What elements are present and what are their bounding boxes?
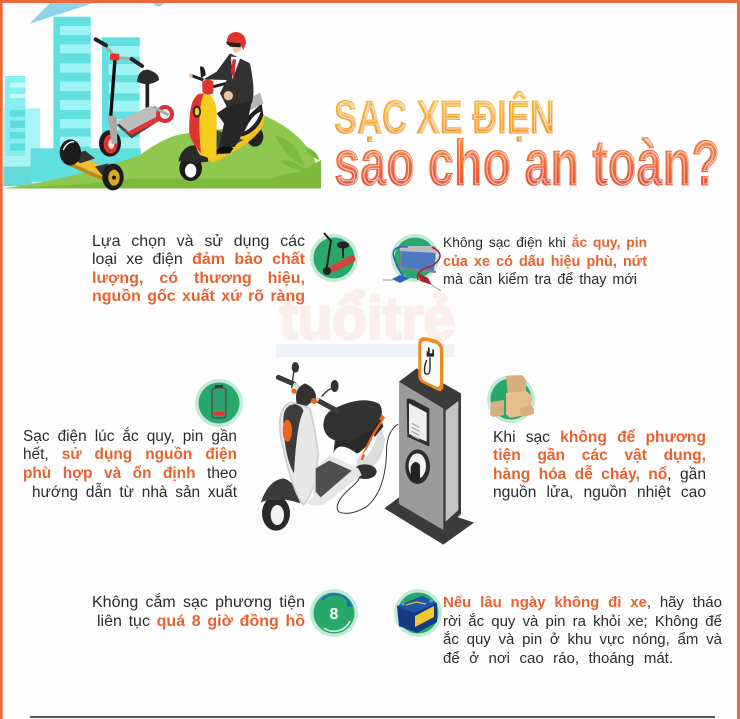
tip 4: keep away from flammables: hàng hóa dễ cháy, nổ, gần [493,466,706,483]
icon: low battery [195,379,243,427]
bottom rule [30,716,715,718]
sky dot [153,3,164,6]
title line 1: SẠC XE ĐIỆN [334,91,555,143]
tip 3: low battery charging [23,427,237,501]
icon: 8-hour clock [310,589,358,637]
clock number: 8 [330,606,339,623]
tip 5: no more than 8 hours: liên tục quá 8 giờ đồng hồ [97,613,305,630]
icon: blue battery [394,589,442,637]
icon: battery with cables [383,234,441,291]
tip 5: no more than 8 hours [92,593,305,630]
charging station [384,337,474,545]
city buildings [3,17,141,186]
tip 3: low battery charging: Sạc điện lúc ắc quy, pin gần [23,428,237,445]
center illustration: scooter at charging station [261,337,474,545]
tip 2: damaged battery: Không sạc điện khi ắc quy, pin [443,235,647,250]
tip 6: long-term storage: Nếu lâu ngày không đi xe, hãy tháo [443,594,722,611]
watermark logo: tuổitrẻ [279,285,455,352]
title [334,91,720,199]
illustration: city, scooters and rider [3,3,321,190]
green hill [3,115,321,188]
sky shape [29,3,93,24]
tip 2: damaged battery: của xe có dấu hiệu phù, nứt [443,254,647,270]
tip 2: damaged battery: mà cần kiểm tra để thay mới [443,272,637,288]
tip 4: keep away from flammables: nguồn lửa, nguồn nhiệt cao [493,484,706,501]
tip 6: long-term storage: ắc quy và pin ở khu vực nóng, ẩm và [443,631,722,648]
kick scooter [96,39,174,157]
charging cable [337,424,398,513]
tip 3: low battery charging: hướng dẫn từ nhà sản xuất [32,484,237,501]
tip 6: long-term storage: rời ắc quy và pin ra khỏi xe; Không để [443,613,722,630]
icon: cardboard boxes [487,375,535,423]
tip 1: choose quality vehicle: loại xe điện đảm bảo chất [92,251,305,268]
tip 1: choose quality vehicle: Lựa chọn và sử dụng các [92,233,305,250]
tip 5: no more than 8 hours: Không cắm sạc phương tiện [92,594,305,611]
watermark [276,285,455,357]
tip 6: long-term storage: để ở nơi cao ráo, thoáng mát. [443,650,673,667]
tip 1: choose quality vehicle [92,233,305,305]
tip 1: choose quality vehicle: lượng, có thương hiệu, [92,270,305,287]
handlebars [278,377,337,411]
tip 1: choose quality vehicle: nguồn gốc xuất xứ rõ ràng [92,288,305,305]
tip 4: keep away from flammables: Khi sạc không để phương [493,429,706,446]
watermark band [276,344,454,357]
tip 6: long-term storage [443,594,722,667]
tip 2: damaged battery [443,234,647,288]
tip 4: keep away from flammables: tiện gần các vật dụng, [493,447,706,464]
plug sign [418,337,443,391]
moped and rider [178,32,265,181]
tip 4: keep away from flammables [493,429,706,501]
hoverboard [60,139,124,190]
electric scooter [261,362,385,531]
icon: kick scooter [310,233,358,282]
tip 3: low battery charging: phù hợp và ổn định theo [23,465,237,482]
tip 3: low battery charging: hết, sử dụng nguồn điện [23,446,237,463]
